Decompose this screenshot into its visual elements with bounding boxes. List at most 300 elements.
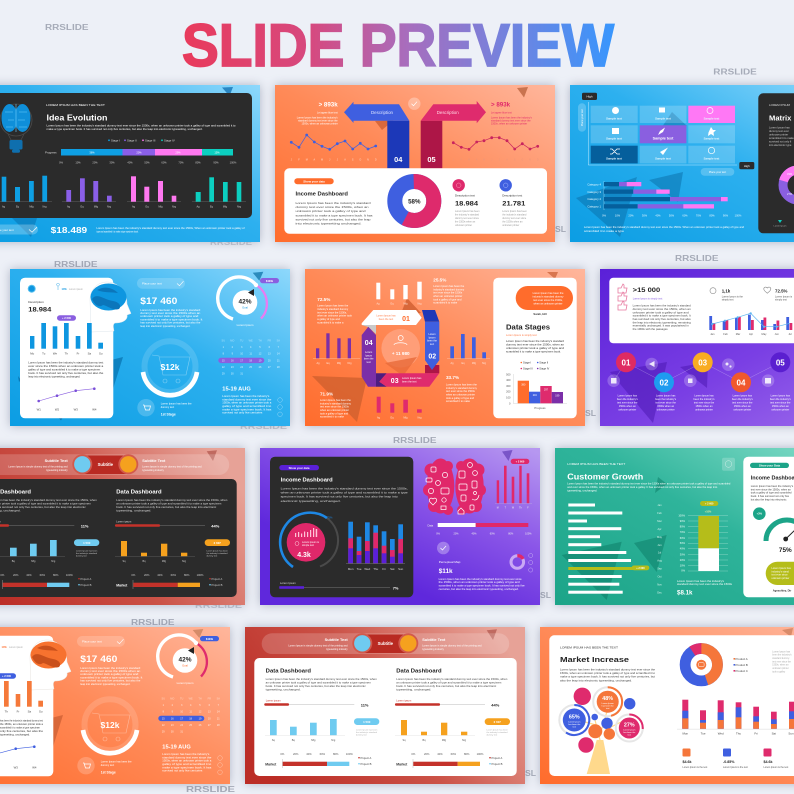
card: description: Description — [28, 300, 44, 304]
progress — [279, 581, 399, 590]
subtitle band: Lorem Ipsum is simple dummy text of the printing and — [288, 644, 348, 647]
progress bar: data — [428, 523, 532, 536]
bar chart: purple: Eq — [326, 362, 330, 365]
bar chart: purple: Mfg — [337, 362, 342, 365]
stat: left: Lorem Ipsum has been the industry's — [297, 116, 338, 120]
calendar: 28 — [277, 366, 280, 369]
progress bar: 10% — [75, 160, 81, 164]
dashboard right: Mfg — [442, 739, 447, 742]
calendar: 28 — [217, 724, 220, 727]
dashboard left: Lorem Ipsum has been — [76, 550, 98, 552]
bar chart: weekdays: Fr — [77, 352, 79, 356]
stacked bar chart: weekly: Thu — [373, 567, 379, 571]
card: data stages: Lorem Ipsum is simply text — [506, 333, 537, 337]
bubble: 65% — [559, 705, 589, 735]
stat: $8.1k: standard dummy text ever since the 1500s — [677, 582, 733, 586]
stat: 25.5%: took a galley of type and — [433, 297, 462, 301]
pill: place your text: Place your text — [82, 640, 102, 644]
calendar: 1 — [163, 704, 165, 707]
bubble: 48%: text — [606, 707, 610, 710]
stat: 72.5%: industry's standard dummy — [317, 307, 349, 311]
side note: standard dummy — [772, 657, 790, 660]
step: 01 — [616, 352, 638, 412]
calendar: 14 — [217, 711, 220, 714]
card: description: the 1500s, an unknown printer took a — [0, 722, 43, 726]
legend: Stage II — [539, 360, 549, 364]
horizontal bar chart: Oct — [657, 575, 662, 579]
stacked bar chart: 90% — [723, 214, 729, 218]
legend: products — [734, 657, 748, 673]
calendar: 8 — [223, 353, 225, 356]
watermarks: SL — [540, 590, 551, 600]
white panel — [254, 658, 517, 776]
stat: 72.5%: 72.5% — [317, 297, 330, 302]
arrow: 04 blue — [344, 102, 409, 168]
arrow: step 02 — [425, 322, 439, 373]
step: 03 — [693, 352, 715, 412]
line chart: blue: N — [367, 158, 369, 161]
step icons — [607, 358, 774, 387]
calendar: WE — [189, 698, 193, 701]
calendar: TH — [258, 340, 262, 343]
stat: 1,1k: 1,1k — [722, 288, 731, 294]
heading: LOREM IPSUM HAS BEEN THE TEXT — [46, 103, 105, 107]
line chart: weeks: W3 — [74, 408, 78, 412]
card: stats: Lorem Ipsum has been the industry's standard — [633, 304, 691, 308]
text block — [140, 308, 203, 328]
calendar: 10 — [180, 711, 184, 714]
card: description: 10% — [2, 645, 7, 649]
olive bubble: Lorem Ipsum has — [772, 567, 792, 570]
card: stats: the leap into electronic typesetting, remaining — [633, 320, 691, 324]
calendar: 23 — [231, 366, 234, 369]
legend: products: Product B — [736, 663, 748, 667]
progress bar: data: 20% — [453, 532, 459, 536]
panel: market increase slide — [540, 627, 794, 784]
bar chart: progress: 200 — [506, 390, 511, 394]
dashboard left: 11% — [361, 702, 369, 707]
line chart: pink: J — [453, 158, 455, 161]
stage block: dummy text — [101, 763, 114, 767]
icon: image tile — [722, 458, 735, 471]
card: matrix: dummy text ever — [769, 129, 789, 133]
line chart: pink: D — [537, 158, 539, 161]
dashboard right: Lorem Ipsum has been — [206, 550, 229, 552]
dashboard right: dummy text — [206, 554, 218, 558]
stat: left: > 893k — [319, 102, 338, 108]
calendar: 5 — [199, 704, 201, 707]
progress: Lorem Ipsum — [280, 581, 296, 585]
dashboard left: Mfg — [311, 739, 316, 742]
card: income dashboard: but also the leap into electronic — [751, 497, 787, 501]
card: data stages: unknown printer took a galley of type and — [506, 346, 565, 350]
subtitle band: Lorem Ipsum is simple dummy text of the printing and — [8, 465, 68, 468]
dashboard left: Bq — [292, 739, 295, 742]
bar chart: weekdays: We — [53, 352, 58, 356]
column gauge: 10% — [680, 563, 686, 567]
bar chart: pink — [377, 397, 422, 420]
matrix axes — [588, 102, 737, 165]
bar chart: blue: Mfg — [472, 362, 477, 365]
pill: place your text — [77, 636, 125, 647]
line chart: blue: S — [352, 158, 354, 161]
heading: Lorem Ipsum has been the industry's standard dummy text ever since the — [560, 668, 656, 672]
arrow: 05 pink: 05 — [427, 155, 436, 164]
step: 01: 1500s when an — [619, 405, 636, 408]
bar chart: progress: 100 — [506, 396, 511, 400]
line chart: pink: M — [468, 158, 470, 161]
heading: Lorem Ipsum has been the industry's standard dummy text ever since the 1500s, when an unknown printer took a galley of type and scrambled it to — [46, 124, 236, 128]
calendar: 17 — [240, 359, 244, 362]
step: 03: 1500s when an — [696, 405, 713, 408]
bar chart: pink: M — [497, 508, 499, 510]
horizontal bar chart: + 2 600 — [636, 567, 645, 570]
progress bar: 60% — [161, 160, 167, 164]
calendar: 25 — [249, 366, 253, 369]
watermarks: SL — [525, 768, 536, 778]
stat: 33.7%: Lorem Ipsum has been the — [446, 382, 477, 386]
date block: Lorem Ipsum has been the industry's — [162, 752, 210, 756]
bar chart: blue — [447, 334, 490, 365]
stat: 21.781: unknown printer — [502, 224, 520, 227]
dashboard right: 2 607 — [494, 720, 501, 724]
progress bar: data: 100% — [525, 532, 532, 536]
calendar: 3 — [181, 704, 183, 707]
step: 02 — [654, 372, 677, 412]
watermarks: RRSLIDE — [131, 617, 175, 627]
progress bar: 70% — [178, 160, 184, 164]
bar chart: white: Eq — [390, 302, 394, 306]
dashboard left: Lorem Ipsum has been the industry's standard dummy text ever since the 1500s, when — [266, 677, 377, 681]
step: 02: Lorem Ipsum has — [656, 394, 676, 398]
bar chart: weekdays — [30, 315, 103, 356]
calendar: 4 — [190, 704, 192, 707]
stat: 72.5% — [764, 287, 793, 302]
stat: left: standard dummy text ever since the — [298, 120, 338, 122]
step: 05: Lorem Ipsum has — [771, 394, 791, 398]
bar chart: weekdays: Th — [65, 352, 68, 356]
stat: 21.781: Lorem Ipsum has been — [502, 210, 527, 213]
matrix grid: Sample text — [655, 156, 671, 160]
stacked bar chart: Category 3 — [587, 190, 601, 194]
arrow: step 03: been the text — [402, 380, 417, 384]
subtitle band: typesetting industry — [46, 469, 68, 472]
subtitle band: Subtitle Text — [325, 637, 348, 642]
calendar: 17 — [180, 717, 184, 720]
stacked bar chart: weekly: Fri — [382, 567, 386, 571]
dashboard right: 100% — [477, 752, 484, 756]
calendar: 22 — [162, 724, 165, 727]
line chart: blue: A — [344, 158, 346, 161]
dashboard right: Lorem Ipsum has been — [486, 728, 509, 732]
calendar: TU — [180, 698, 184, 701]
column gauge: 100% — [678, 514, 686, 518]
calendar: 31 — [240, 373, 244, 376]
calendar: 7 — [278, 346, 280, 349]
card: stats — [609, 278, 794, 343]
card: description: has been the industry's standard dummy text — [0, 718, 43, 722]
text pill with check — [0, 224, 38, 234]
card: income dashboard: text ever since the 1500s, when an — [751, 487, 791, 491]
card: description: Su — [39, 710, 43, 714]
matrix grid: Sample text — [606, 136, 622, 140]
text block: has survived not only five centuries, but also the — [80, 678, 141, 682]
calendar: 1 — [223, 346, 225, 349]
card: stats: unknown printer took a galley of type and — [633, 310, 689, 314]
card: description: only five centuries, but also the — [0, 729, 44, 733]
dashboard left: the industry's standard — [356, 731, 378, 734]
legend: Stage I — [111, 138, 120, 142]
calendar: 2 — [172, 704, 174, 707]
stat: $8.1k — [677, 579, 733, 596]
stat value: $17 460 — [80, 654, 117, 664]
dashboard right: 80% — [184, 573, 190, 577]
subtitle band: Subtitle Text — [422, 637, 446, 642]
calendar: SU — [162, 698, 165, 701]
bar chart: weekdays: Tu — [42, 352, 46, 356]
card: income dashboard: Lorem Ipsum has been the industry's standard — [296, 201, 371, 205]
calendar: 6 — [269, 346, 271, 349]
stat: 18.984: the industry's standard — [455, 214, 480, 216]
stat: 25.5%: Lorem Ipsum has been the — [433, 284, 465, 288]
gauge: 42%: $100k — [206, 637, 214, 641]
stat: 72.5% — [317, 297, 353, 324]
watermarks: SL — [555, 224, 566, 234]
combo chart: Mar — [736, 332, 740, 336]
calendar: 21 — [277, 359, 280, 362]
tree bubble chart — [559, 687, 643, 774]
pill: horizontal: Place your text — [709, 170, 726, 174]
line chart: pink: A — [506, 158, 508, 161]
calendar: FR — [208, 698, 211, 701]
stat: 1,1k: Lorem Ipsum is the — [722, 296, 744, 298]
quote bubble: text ever since the 1500s, — [533, 298, 563, 302]
calendar: 19 — [259, 359, 262, 362]
dashboard right: dummy text — [486, 734, 498, 736]
stat: 25.5%: 25.5% — [433, 278, 446, 282]
stat: 72.5%: 72.5% — [775, 288, 788, 294]
gauge: 4.3k: Lorem ipsum is — [302, 541, 320, 544]
bubble: 48%: 48% — [602, 696, 613, 702]
calendar: 3 — [241, 346, 243, 349]
progress bar: data: 80% — [508, 532, 514, 536]
heading — [46, 103, 236, 131]
panel: purple timeline slide — [600, 269, 794, 426]
arrow: step 02: text — [430, 343, 434, 346]
dashboard left: Market — [265, 762, 277, 766]
bar chart: progress: 204 — [533, 394, 537, 397]
stat block: perceptual map: the 1500s, when an unknown printer took a galley of type and — [439, 580, 520, 584]
stat: 1,1k: simply text — [722, 298, 734, 302]
card: income dashboard: Income Dashboard — [296, 192, 348, 198]
calendar — [158, 698, 220, 734]
column gauge: 60% — [680, 536, 686, 540]
bar chart: pink: F — [527, 508, 529, 510]
combo chart: Jul — [788, 332, 792, 336]
bar charts — [0, 176, 246, 208]
dashboard right: 40% — [437, 752, 443, 756]
gauge: 75%: 75% — [779, 547, 792, 554]
date block: galley of type and scrambled it to — [222, 404, 272, 408]
horizontal bar chart: Jul — [658, 551, 662, 555]
step: 05: 1500s when an — [772, 405, 789, 408]
calendar: 11 — [189, 711, 193, 714]
step: 03: 03 — [698, 358, 708, 367]
dark panel — [270, 457, 413, 597]
heading: Customer Growth — [567, 472, 644, 482]
subtitle band: Lorem Ipsum is simple dummy text of the printing and — [142, 465, 202, 468]
calendar: 24 — [180, 724, 184, 727]
step: 02: unknown printer — [657, 408, 675, 412]
heading: Market Increase — [560, 655, 629, 664]
horizontal bar chart: Apr — [657, 527, 662, 531]
card: description: scrambled it to make a type specimen — [0, 726, 40, 730]
arrow: step 03: 03 — [391, 378, 399, 385]
step: 04: unknown printer — [733, 408, 751, 412]
bar chart: progress: Progress — [534, 406, 546, 410]
step: 03: Lorem Ipsum has — [694, 394, 714, 398]
horizontal bar chart: Sep — [657, 567, 662, 571]
subtitle band: Subtitle Text — [142, 458, 166, 463]
stage block — [137, 399, 192, 416]
quote bubble: Lorem Ipsum has been the — [533, 291, 564, 295]
arrow: step 04: been the — [364, 358, 374, 361]
pill: vertical — [578, 103, 586, 132]
date block — [162, 744, 222, 775]
dashboard left: 1 500 — [363, 720, 371, 724]
calendar: WE — [249, 340, 253, 343]
arrow: step 01 — [362, 310, 439, 334]
donut chart: 27% — [787, 192, 793, 196]
dashboard right: an unknown printer took a galley of type and scrambled it to make a type specimen — [396, 680, 502, 684]
gauge: 42%: Goal — [182, 664, 188, 668]
calendar: 8 — [163, 711, 165, 714]
calendar: 13 — [208, 711, 211, 714]
horizontal bar chart: May — [657, 535, 663, 539]
calendar — [218, 340, 280, 376]
arrow: step 04: Ipsum — [365, 354, 372, 357]
line chart: blue: J — [329, 158, 331, 161]
watermarks: RRSLIDE — [210, 237, 252, 247]
bar chart: progress: 297 — [544, 388, 549, 392]
dashboard right: Lorem ipsum — [116, 520, 131, 524]
dashboard left: Bq — [12, 560, 15, 563]
step: 04: 04 — [737, 378, 746, 387]
column gauge: 20% — [680, 558, 686, 562]
date block: 15-19 AUG — [162, 744, 191, 750]
date block — [222, 386, 282, 417]
stat value: $17 460 — [140, 296, 177, 306]
progress bar: 36% — [89, 150, 95, 154]
progress bar: 50% — [144, 160, 150, 164]
panel: blue brain slide — [10, 269, 290, 426]
stat: 33.7%: took a galley of type and — [446, 396, 475, 400]
stacked bar chart: weekly: Wed — [364, 567, 371, 571]
step: 02: 02 — [660, 378, 669, 387]
bar charts: Eq — [145, 206, 149, 208]
horizontal bar chart: Jun — [657, 543, 662, 547]
stacked bar chart: weekly: Tue — [357, 567, 362, 571]
pill: horizontal — [701, 168, 734, 176]
card: data stages: Lorem Ipsum has been the industry's standard — [506, 339, 565, 343]
line chart: pink: M — [483, 158, 485, 161]
line chart: weeks: W2 — [55, 408, 60, 412]
card: matrix: Matrix — [769, 114, 792, 122]
olive bubble: text ever since — [772, 574, 788, 577]
line chart: blue: M — [321, 158, 323, 161]
line chart: blue: O — [359, 158, 361, 161]
line chart: weeks — [37, 387, 97, 412]
stat: right: standard dummy text ever since the — [491, 120, 531, 122]
card: description: W3 — [14, 766, 18, 770]
stat: $4.6k pink: $4.6k — [764, 760, 772, 764]
calendar: 13 — [268, 353, 271, 356]
stage block: dummy text — [161, 405, 174, 409]
side note: text ever since the — [772, 660, 792, 663]
progress bar: Progress — [45, 150, 57, 154]
progress bar: 15% — [214, 150, 220, 154]
step: 01: 01 — [622, 358, 631, 367]
dashboard right: Lorem Ipsum has been the industry's standard dummy text ever since the 1500s, when — [396, 677, 508, 681]
stat: left: Let agree blue text — [317, 112, 338, 114]
stat: 18.984 — [452, 179, 480, 227]
bar charts: Mfg — [223, 206, 228, 208]
combo chart: Feb — [723, 332, 728, 336]
side note: 1500s, when an — [772, 665, 789, 667]
stacked bar chart: weekly: Sat — [390, 567, 395, 571]
step: 02: text ever since the — [656, 402, 676, 404]
bubble: 27%: 27% — [624, 722, 635, 728]
side note — [772, 650, 792, 673]
card: matrix: unknown printer — [769, 132, 788, 136]
bar charts: Eq — [80, 206, 84, 208]
card: description: Fr — [17, 710, 19, 714]
legend: Stage III — [145, 138, 156, 142]
stat block: perceptual map: Lorem Ipsum has been the industry's standard dummy text ever since — [439, 577, 522, 581]
bar chart: pink: Th — [519, 508, 523, 510]
bar charts: Ag — [132, 206, 136, 208]
stat block: perceptual map — [439, 560, 525, 591]
card: matrix — [758, 93, 794, 233]
dashboard right: Nrg — [462, 739, 467, 742]
dashboard right: 20% — [424, 752, 430, 756]
stage block — [77, 757, 132, 774]
stat: 25.5% — [433, 278, 465, 305]
bar chart: progress: 300 — [506, 384, 511, 388]
line chart: blue: M — [306, 158, 308, 161]
icon: brain — [30, 642, 66, 668]
pill: place your text — [137, 278, 185, 289]
calendar: MO — [170, 698, 174, 701]
progress bar: 20% — [136, 150, 142, 154]
radial chart: $12k: $12k — [161, 362, 180, 372]
panel: orange brain slide — [0, 627, 230, 784]
text block: Lorem Ipsum has been the industry's standard — [80, 666, 141, 670]
date block: survived not only five centuries — [162, 769, 203, 773]
step: 05: unknown printer — [771, 408, 789, 412]
bar charts: Eq — [16, 206, 20, 208]
text block: Lorem Ipsum has been the industry's standard — [140, 308, 201, 312]
heading: make a type specimen book. It has survived not only five centuries, but also the leap into electronic typesetting, unchanged. — [46, 127, 203, 131]
arrow: 04 blue: Description — [371, 110, 394, 115]
line chart: blue: J — [291, 158, 293, 161]
dark panel: Lorem Ipsum has been the industry's standard dummy text ever since the 1500s, — [281, 486, 408, 490]
heading: typesetting, unchanged. — [567, 488, 598, 492]
progress bar: data: 0% — [436, 532, 441, 536]
stat: $8.1k: Lorem Ipsum has been the industry's — [677, 579, 725, 583]
gauge: 42%: Goal — [242, 306, 248, 310]
stat: 25.5%: when an unknown printer — [433, 294, 462, 298]
